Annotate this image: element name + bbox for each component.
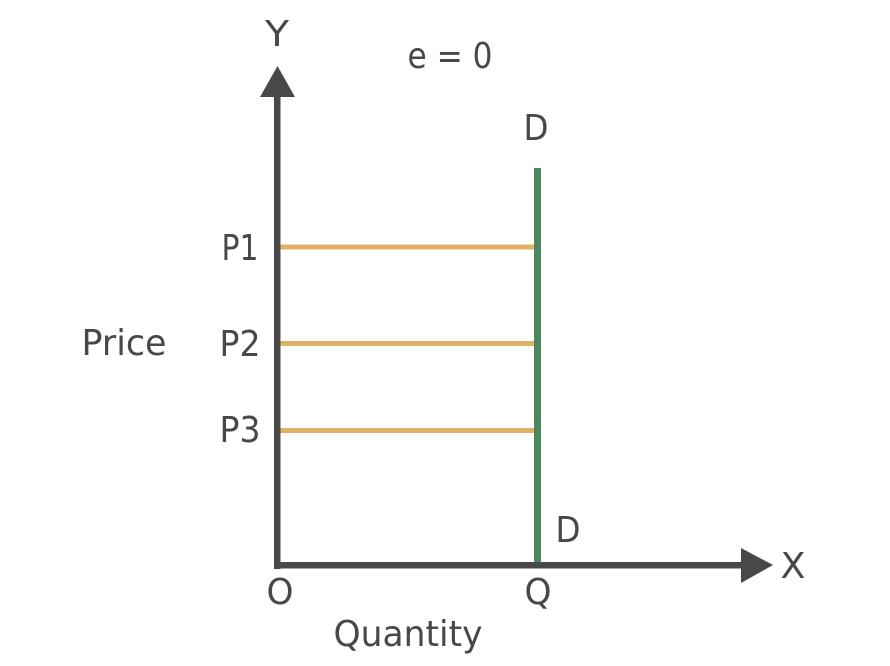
label X: X — [780, 546, 806, 587]
label O: O — [266, 572, 294, 613]
label Q: Q — [524, 572, 552, 613]
label Y: Y — [264, 14, 290, 55]
label D top: D — [524, 108, 548, 149]
Y axis with arrow — [260, 66, 295, 569]
price level line P3 — [280, 428, 536, 433]
demand line D — [534, 168, 541, 562]
label P2: P2 — [220, 324, 260, 365]
X axis with arrow — [274, 548, 773, 583]
label P3: P3 — [220, 410, 260, 451]
label D bottom: D — [556, 510, 580, 551]
label Quantity: Quantity — [334, 614, 482, 655]
price level line P2 — [280, 341, 536, 346]
price level line P1 — [280, 244, 536, 250]
equation e = 0: e = 0 — [408, 36, 492, 77]
label Price: Price — [82, 323, 166, 364]
label P1: P1 — [222, 228, 258, 269]
